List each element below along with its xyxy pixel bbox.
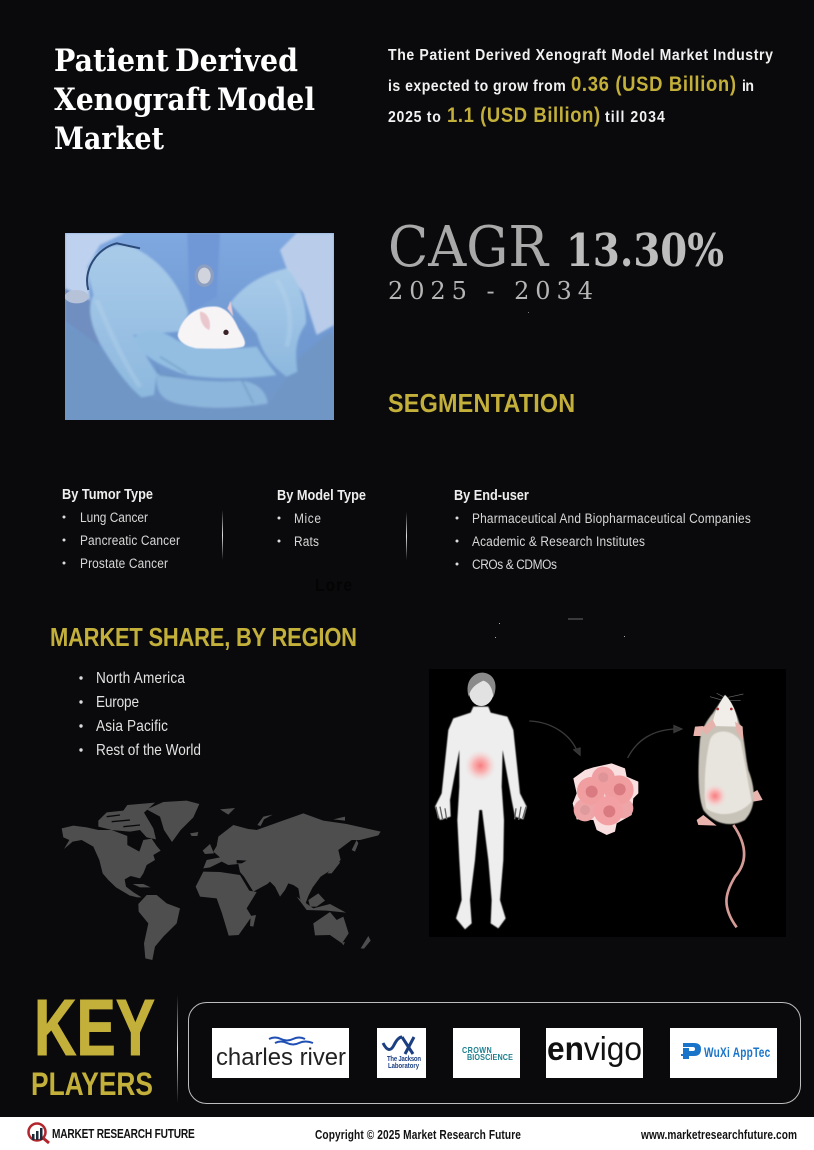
faint stray text: Lore <box>315 575 352 595</box>
market growth summary text: The Patient Derived Xenograft Model Market Industry <box>388 46 774 64</box>
region list: Asia Pacific <box>96 718 169 735</box>
key players label <box>31 983 155 1102</box>
key players label: PLAYERS <box>31 1066 153 1102</box>
segment: by tumor type: Prostate Cancer <box>80 555 169 571</box>
market growth summary text: is expected to grow from <box>388 77 566 95</box>
CAGR stat: 13.30% <box>566 224 724 277</box>
market growth summary text: 1.1 (USD Billion) <box>447 104 600 127</box>
market growth summary text: 2025 to <box>388 108 441 126</box>
tumor cell cluster <box>573 763 638 835</box>
icon: market research future logo <box>28 1124 49 1143</box>
segment: by tumor type <box>62 485 181 571</box>
region list <box>79 670 201 759</box>
human figure with tumor <box>435 673 527 929</box>
segment: by end-user: Academic & Research Institutes <box>472 533 645 549</box>
mouse <box>178 301 245 349</box>
CAGR stat: CAGR <box>388 215 550 280</box>
logo: crown bioscience: CROWN <box>462 1045 492 1055</box>
market growth summary text <box>388 46 774 127</box>
segment: by model type <box>277 486 366 549</box>
CAGR stat: 2025 - 2034 <box>388 277 593 305</box>
segment: by end-user: By End-user <box>454 486 529 503</box>
mouse with implanted tumor <box>693 693 763 927</box>
footer bar: www.marketresearchfuture.com <box>640 1128 797 1142</box>
market growth summary text: 0.36 (USD Billion) <box>571 73 736 96</box>
title <box>54 43 315 157</box>
segment: by tumor type: Lung Cancer <box>80 509 149 525</box>
CAGR stat <box>388 215 724 305</box>
segment: by end-user: Pharmaceutical And Biopharmaceutical Companies <box>472 510 751 526</box>
logo: the jackson laboratory: The Jackson <box>387 1056 421 1063</box>
arrow: human to tumor cells <box>529 721 580 755</box>
segment: by end-user <box>454 486 751 572</box>
key players panel <box>188 1002 800 1104</box>
market growth summary text: in <box>742 77 754 95</box>
title: Patient Derived <box>54 43 298 79</box>
logo: wuxi apptec <box>670 1028 777 1078</box>
logo: envigo: envigo <box>547 1030 642 1067</box>
title: Market <box>54 121 165 157</box>
region list: Rest of the World <box>96 742 201 759</box>
logo: wuxi apptec: WuXi AppTec <box>704 1044 770 1060</box>
logo: the jackson laboratory <box>377 1028 426 1078</box>
logo: charles river <box>212 1028 349 1078</box>
segment: by model type: Rats <box>294 533 319 549</box>
segmentation heading: SEGMENTATION <box>388 390 575 418</box>
key players label: KEY <box>34 983 155 1072</box>
xenograft diagram <box>429 669 786 937</box>
photo: gloved hands holding a white mouse <box>65 233 334 420</box>
segment: by tumor type: By Tumor Type <box>62 485 153 502</box>
segment: by model type: Mice <box>294 510 321 526</box>
region list: North America <box>96 670 186 687</box>
footer bar: MARKET RESEARCH FUTURE <box>52 1127 195 1141</box>
segment: by model type: By Model Type <box>277 486 366 503</box>
footer bar: Copyright © 2025 Market Research Future <box>315 1128 521 1142</box>
arrow: tumor cells to mouse <box>628 726 682 758</box>
logo: the jackson laboratory: Laboratory <box>388 1063 419 1070</box>
footer bar <box>0 1117 814 1150</box>
world map <box>62 801 381 960</box>
title: Xenograft Model <box>54 82 315 118</box>
segment: by end-user: CROs & CDMOs <box>472 556 557 572</box>
segment: by tumor type: Pancreatic Cancer <box>80 532 181 548</box>
logo: crown bioscience: BIOSCIENCE <box>467 1052 513 1062</box>
logo: crown bioscience <box>453 1028 520 1078</box>
market share heading: MARKET SHARE, BY REGION <box>50 623 357 652</box>
region list: Europe <box>96 694 139 711</box>
market growth summary text: till 2034 <box>605 108 665 126</box>
logo: charles river: charles river <box>216 1044 346 1071</box>
